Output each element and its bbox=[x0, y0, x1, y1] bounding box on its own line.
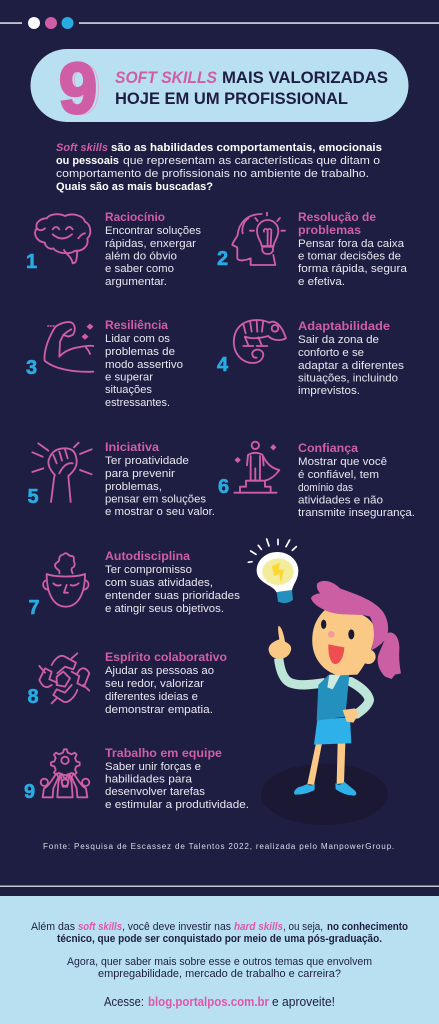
skill description: adaptar a diferentes bbox=[298, 360, 405, 372]
header decoration: line and three dots bbox=[0, 17, 439, 29]
light bulb bbox=[257, 552, 298, 603]
skill 6: Confiança bbox=[218, 441, 415, 519]
ear bbox=[361, 649, 376, 664]
number 1: 1 bbox=[26, 251, 37, 273]
hair bbox=[311, 581, 388, 651]
number 3: 3 bbox=[26, 357, 37, 379]
skill description bbox=[298, 238, 408, 288]
paragraph on hard skills: , ou seja, bbox=[283, 921, 323, 933]
skill description: estressantes. bbox=[105, 397, 170, 409]
skill description: além do óbvio bbox=[105, 250, 177, 262]
paragraph on hard skills: no conhecimento bbox=[327, 921, 408, 933]
number 4: 4 bbox=[217, 354, 229, 376]
call to action: blog.portalpos.com.br bbox=[148, 995, 269, 1009]
skill 3: Resiliência bbox=[26, 318, 183, 409]
title text bbox=[115, 69, 388, 108]
icon: raised fist bbox=[32, 443, 92, 502]
skill heading: Iniciativa bbox=[105, 440, 159, 454]
skill 8: Espírito colaborativo bbox=[28, 650, 227, 716]
skill description: e efetiva. bbox=[298, 276, 345, 288]
skill heading: Raciocínio bbox=[105, 210, 165, 224]
skill description: para prevenir bbox=[105, 468, 175, 480]
skill description: e mostrar o seu valor. bbox=[105, 506, 215, 518]
intro paragraph: que representam as características que ditam o bbox=[123, 155, 380, 167]
number 9: 9 bbox=[24, 781, 35, 803]
big number 9: 9 bbox=[62, 51, 101, 130]
skill description: Ter compromisso bbox=[105, 564, 192, 576]
source note: Fonte: Pesquisa de Escassez de Talentos 2022, realizada pelo ManpowerGroup. bbox=[43, 842, 395, 851]
skill 7: Autodisciplina bbox=[28, 549, 241, 619]
intro paragraph bbox=[56, 142, 382, 193]
skill description: argumentar. bbox=[105, 276, 167, 288]
skill 2: Resolução de problemas bbox=[217, 210, 408, 288]
skill heading: Resiliência bbox=[105, 318, 168, 332]
intro paragraph: ou pessoais bbox=[56, 155, 119, 167]
hip hand bbox=[343, 708, 359, 723]
skill description bbox=[105, 564, 241, 615]
big number 9: 9 bbox=[59, 50, 97, 129]
skill 4: Adaptabilidade bbox=[217, 319, 405, 397]
ponytail bbox=[378, 632, 401, 679]
title text: HOJE EM UM PROFISSIONAL bbox=[115, 90, 348, 108]
call to action bbox=[104, 995, 335, 1009]
number 8: 8 bbox=[28, 686, 39, 708]
skill description bbox=[298, 334, 405, 397]
skill description bbox=[105, 333, 183, 409]
paragraph on hard skills: Além das bbox=[31, 921, 75, 933]
skill description: e superar bbox=[105, 372, 153, 384]
skill description: e tomar decisões de bbox=[298, 250, 401, 262]
skill description: forma rápida, segura bbox=[298, 263, 408, 275]
skill description: diferentes ideias e bbox=[105, 691, 198, 703]
skill description: domínio das bbox=[298, 482, 353, 494]
skill description: seu redor, valorizar bbox=[105, 678, 204, 690]
skill 5: Iniciativa bbox=[28, 440, 215, 518]
skill heading: Resolução de bbox=[298, 210, 376, 224]
number 2: 2 bbox=[217, 248, 228, 270]
skill description: é confiável, tem bbox=[298, 469, 379, 481]
skill description: Lidar com os bbox=[105, 333, 171, 345]
right arm bbox=[351, 682, 369, 714]
legs bbox=[307, 743, 345, 785]
eyes and nose bbox=[321, 620, 354, 639]
intro paragraph: comportamento de profissionais no ambiente de trabalho. bbox=[56, 168, 369, 180]
shoes bbox=[294, 782, 356, 796]
skill description: situações, incluindo bbox=[298, 372, 398, 384]
intro paragraph: Soft skills bbox=[56, 142, 108, 154]
icon: chameleon bbox=[234, 320, 286, 363]
skill description bbox=[105, 455, 215, 518]
paragraph invitation: Agora, quer saber mais sobre esse e outros temas que envolvem bbox=[67, 956, 372, 968]
skirt bbox=[314, 717, 351, 745]
skill 1: Raciocínio bbox=[26, 210, 201, 288]
skill description: desenvolver tarefas bbox=[105, 786, 206, 798]
skill description: com suas atividades, bbox=[105, 577, 213, 589]
paragraph on hard skills bbox=[31, 921, 408, 945]
paragraph invitation bbox=[67, 956, 372, 980]
skill description: Ajudar as pessoas ao bbox=[105, 665, 214, 677]
number 5: 5 bbox=[28, 486, 39, 508]
skill description: demonstrar empatia. bbox=[105, 704, 213, 716]
ground shadow bbox=[261, 764, 388, 825]
light rays bbox=[248, 539, 296, 562]
call to action: e aproveite! bbox=[272, 995, 335, 1009]
skill heading: Trabalho em equipe bbox=[105, 746, 222, 760]
number 7: 7 bbox=[28, 597, 40, 619]
skill description: problemas de bbox=[105, 346, 175, 358]
intro paragraph: são as habilidades comportamentais, emocionais bbox=[111, 142, 382, 154]
skill description: Ter proatividade bbox=[105, 455, 189, 467]
skill heading: Adaptabilidade bbox=[298, 319, 390, 333]
title text: SOFT SKILLS bbox=[115, 69, 217, 87]
skill description: conforto e se bbox=[298, 347, 364, 359]
skill description: atividades e não bbox=[298, 494, 383, 506]
skill description: situações bbox=[105, 384, 152, 396]
icon: caped hero on podium bbox=[234, 442, 279, 493]
skill description: e saber como bbox=[105, 263, 174, 275]
title text: MAIS VALORIZADAS bbox=[222, 69, 388, 87]
number 6: 6 bbox=[218, 476, 229, 498]
paragraph on hard skills: soft skills bbox=[78, 921, 122, 933]
title banner bbox=[30, 49, 408, 130]
skill description: Sair da zona de bbox=[298, 334, 379, 346]
skill description: e estimular a produtividade. bbox=[105, 799, 249, 811]
vest bbox=[317, 675, 349, 721]
raised hand bbox=[269, 626, 291, 659]
skill description: pensar em soluções bbox=[105, 494, 207, 506]
skill description: Encontrar soluções bbox=[105, 225, 201, 237]
paragraph invitation: empregabilidade, mercado de trabalho e carreira? bbox=[98, 968, 341, 980]
skill description: modo assertivo bbox=[105, 359, 183, 371]
collar bbox=[327, 675, 341, 689]
icon: flexed arm bbox=[44, 322, 93, 372]
skill description: problemas, bbox=[105, 481, 162, 493]
skill description: entender suas prioridades bbox=[105, 590, 241, 602]
footer panel bbox=[0, 886, 439, 1024]
skill heading bbox=[298, 210, 376, 237]
skill description: imprevistos. bbox=[298, 385, 360, 397]
icon: head with puzzle piece bbox=[43, 553, 89, 607]
intro paragraph: Quais são as mais buscadas? bbox=[56, 181, 213, 193]
icon: team and gear bbox=[41, 749, 89, 797]
illustration: woman pointing at a light bulb bbox=[248, 539, 401, 825]
skill description: e atingir seus objetivos. bbox=[105, 603, 224, 615]
paragraph on hard skills: , você deve investir nas bbox=[122, 921, 231, 933]
icon: four interlocked hands bbox=[39, 653, 89, 703]
skill description: transmite insegurança. bbox=[298, 507, 415, 519]
skill description bbox=[105, 761, 249, 811]
face bbox=[312, 608, 375, 675]
skill description: Saber unir forças e bbox=[105, 761, 201, 773]
paragraph on hard skills: técnico, que pode ser conquistado por meio de uma pós-graduação. bbox=[57, 933, 382, 945]
skill description bbox=[105, 225, 201, 288]
skill heading: Espírito colaborativo bbox=[105, 650, 227, 664]
skill heading: Autodisciplina bbox=[105, 549, 190, 563]
skill description bbox=[298, 456, 415, 519]
skill heading: problemas bbox=[298, 223, 361, 237]
call to action: Acesse: bbox=[104, 995, 144, 1009]
skill heading: Confiança bbox=[298, 441, 358, 455]
skill description: rápidas, enxergar bbox=[105, 238, 196, 250]
skill description: Pensar fora da caixa bbox=[298, 238, 405, 250]
skill description bbox=[105, 665, 214, 716]
raised arm bbox=[279, 658, 325, 685]
mouth bbox=[328, 644, 344, 664]
paragraph on hard skills: hard skills bbox=[234, 921, 283, 933]
skill description: habilidades para bbox=[105, 774, 193, 786]
icon: brain bbox=[35, 214, 90, 263]
skill 9: Trabalho em equipe bbox=[24, 746, 249, 811]
skill description: Mostrar que você bbox=[298, 456, 387, 468]
icon: head with light bulb bbox=[232, 213, 285, 265]
